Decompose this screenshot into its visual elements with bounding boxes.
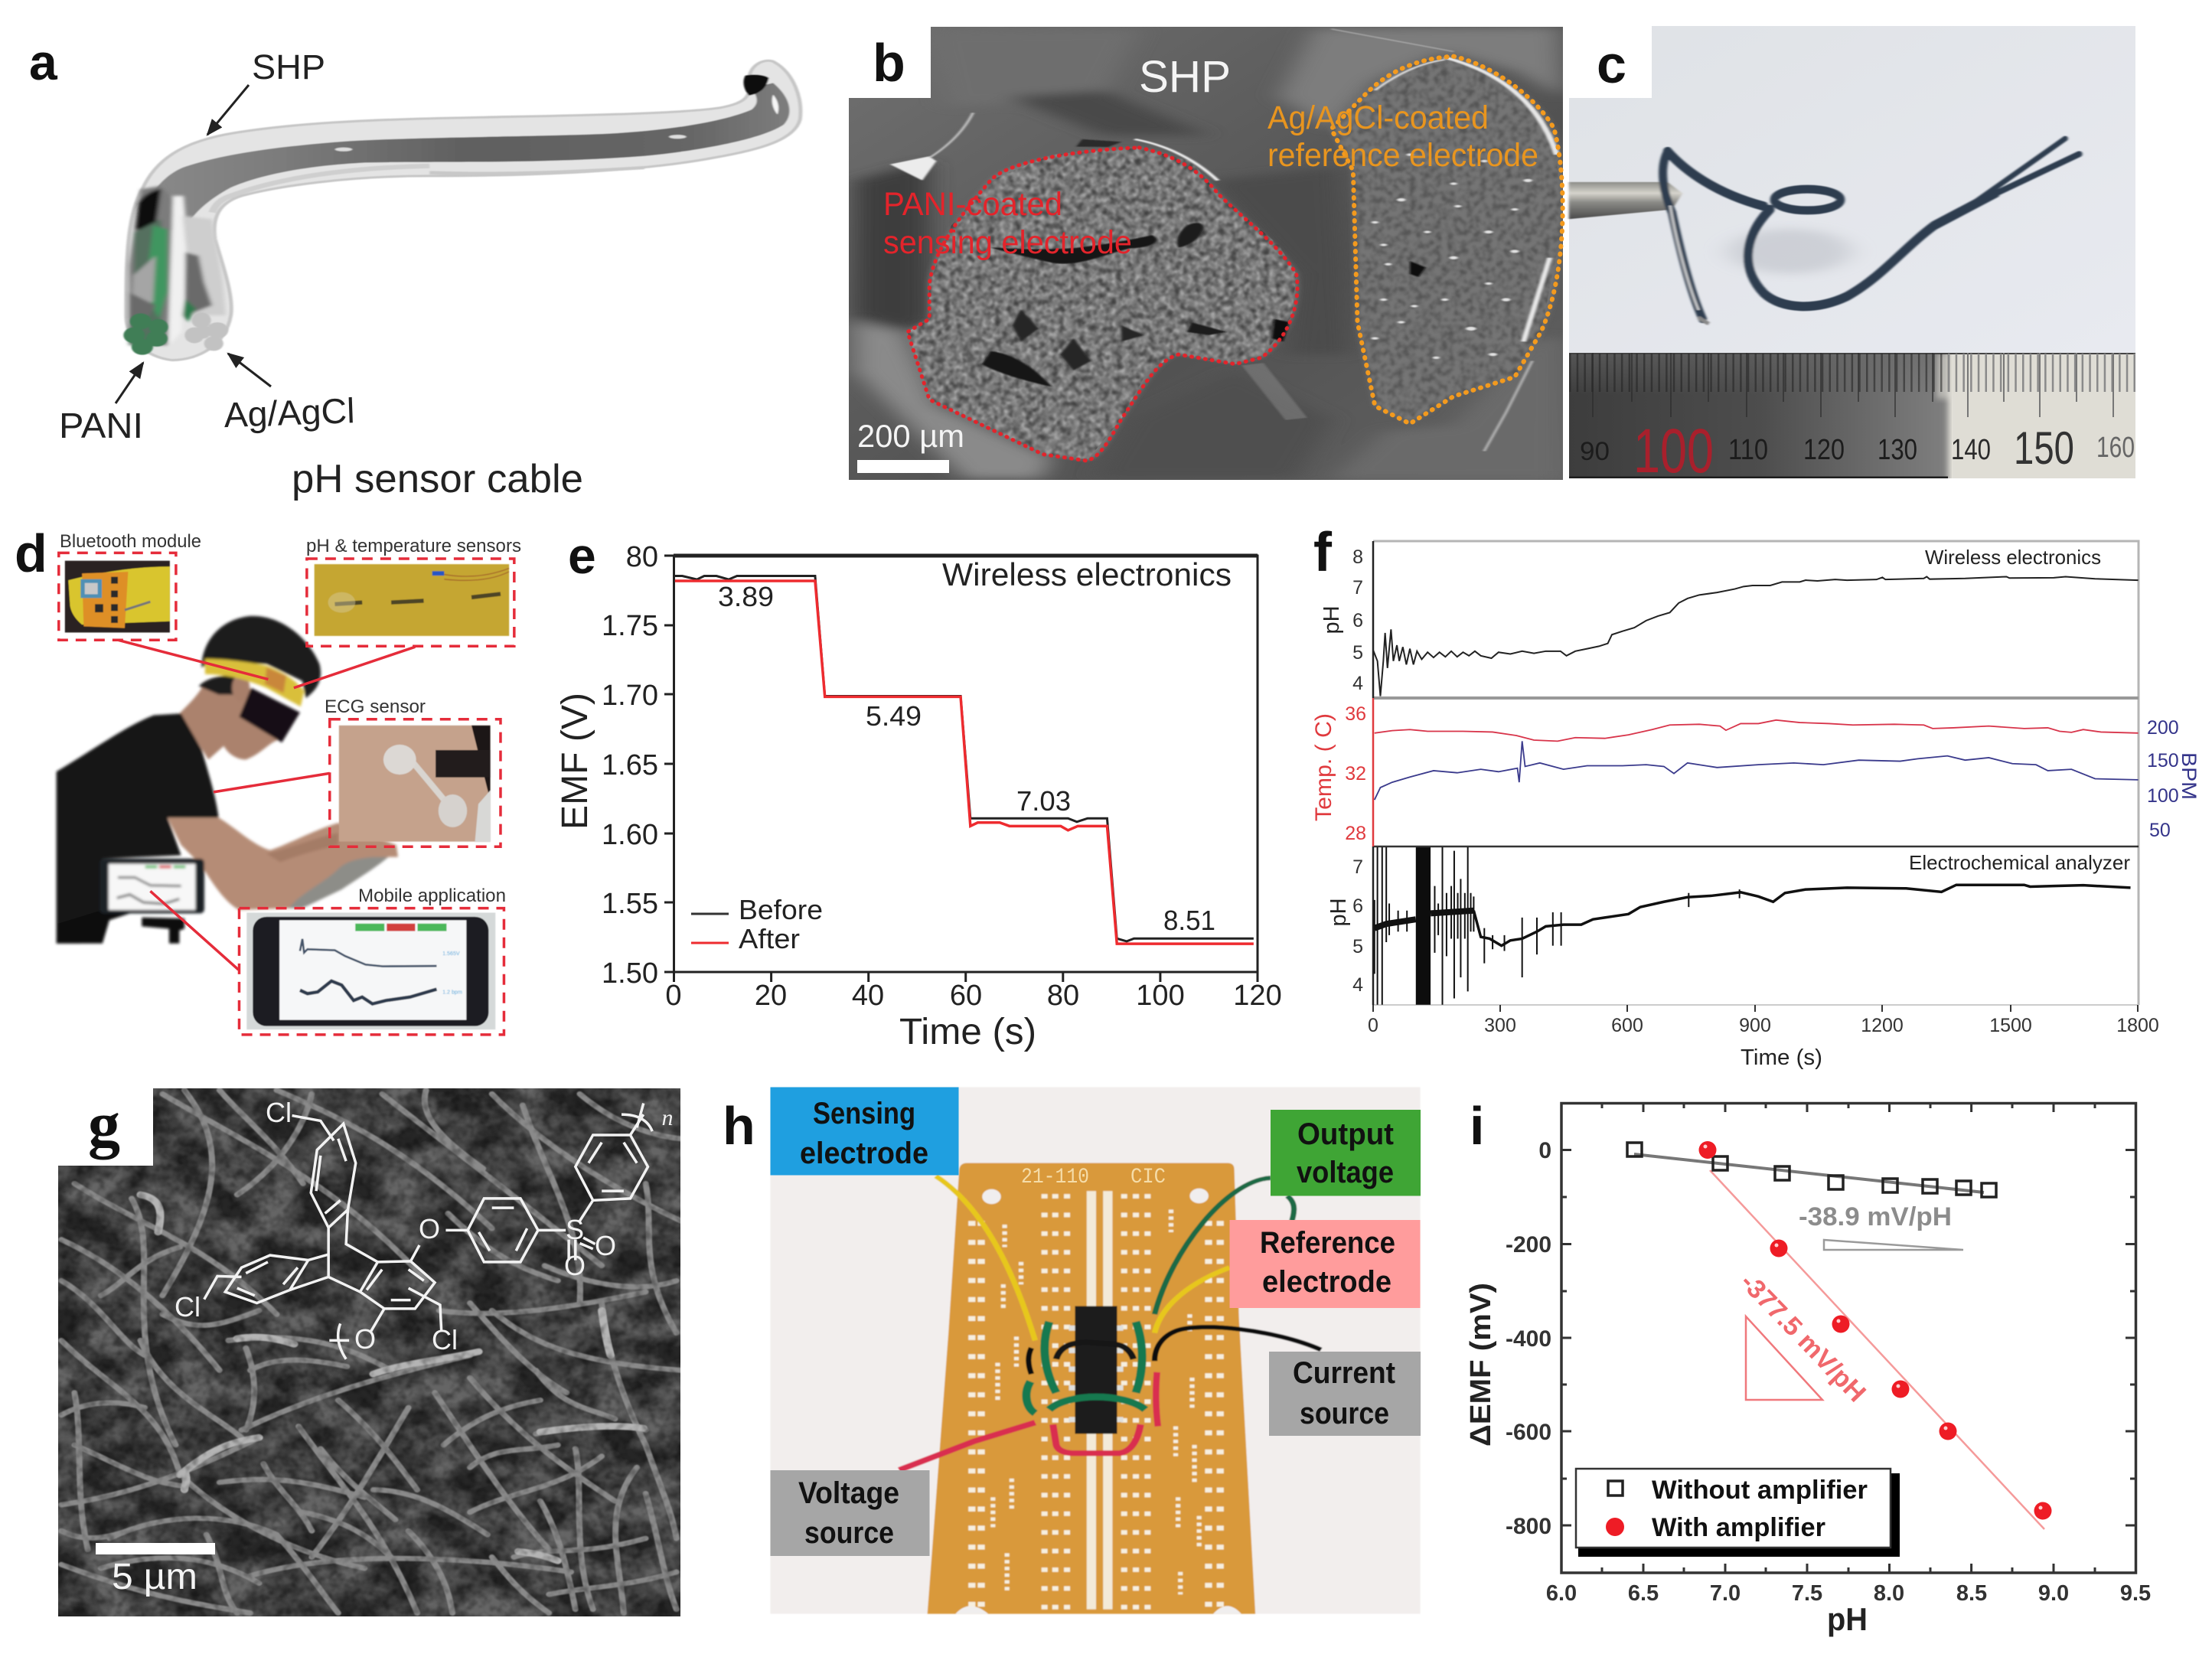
arrow to SHP [207, 85, 249, 135]
left axis labels bottom pH: 4 [1352, 974, 1363, 996]
board print: 21-110 [1021, 1166, 1089, 1189]
panel d: wearable system photo [15, 524, 521, 1035]
photo background [1569, 26, 2135, 353]
label: current source: Current [1293, 1356, 1395, 1390]
polymer chemical structure: Cl [266, 1097, 292, 1128]
x axis tick labels: 0 [1368, 1015, 1378, 1036]
left axis labels top pH: 6 [1352, 610, 1363, 631]
x axis tick labels: 1800 [2116, 1015, 2159, 1036]
small phone [100, 859, 204, 913]
SEM image [849, 27, 1563, 480]
right axis labels BPM: 150 [2147, 750, 2179, 771]
x axis tick labels: 60 [950, 980, 982, 1012]
y axis tick labels: 1.50 [602, 957, 658, 990]
torso [57, 713, 219, 944]
y axis tick labels: -400 [1506, 1326, 1551, 1352]
x axis tick labels: 40 [852, 980, 884, 1012]
axis title: Time: Time (s) [1741, 1045, 1822, 1070]
left axis labels bottom pH [1352, 856, 1363, 996]
panel a: pH sensor cable illustration [29, 34, 801, 501]
polymer chemical structure: Cl [175, 1291, 201, 1323]
panel letter g: g [88, 1089, 120, 1160]
axis title: BPM: BPM [2178, 752, 2201, 800]
y axis tick labels: -200 [1506, 1232, 1551, 1257]
label SHP: SHP [252, 47, 325, 86]
polymer chemical structure: S [566, 1214, 584, 1245]
fit line without amplifier [1634, 1154, 1984, 1192]
photo: mobile application [246, 912, 495, 1029]
scale label: 5 µm [112, 1557, 197, 1597]
label PANI electrode: PANI-coated [883, 186, 1062, 223]
axis title: EMF: EMF (V) [555, 693, 595, 830]
label: current source: source [1300, 1397, 1389, 1430]
polymer chemical structure: Cl [432, 1324, 458, 1355]
x axis tick labels [665, 980, 1282, 1012]
panel letter c: c [1597, 34, 1626, 94]
y axis tick labels [1506, 1138, 1551, 1539]
left axis labels temperature: 28 [1345, 823, 1366, 844]
caption: pH sensor cable [292, 457, 583, 501]
label: output voltage: Output [1297, 1117, 1394, 1151]
y axis tick labels: 1.60 [602, 819, 658, 851]
axis title: pH: pH [1827, 1601, 1868, 1637]
headband [205, 659, 304, 706]
pH step labels: 5.49 [866, 700, 922, 732]
y axis tick labels: 1.65 [602, 749, 658, 781]
left axis labels top pH: 8 [1352, 546, 1363, 568]
x axis tick labels: 300 [1484, 1015, 1516, 1036]
y axis tick labels: -800 [1506, 1514, 1551, 1539]
scale label: 200 µm [857, 418, 964, 454]
photo: Bluetooth module [65, 561, 170, 632]
y axis tick labels: 1.70 [602, 680, 658, 712]
SEM fiber image [58, 1088, 681, 1617]
label Bluetooth module: Bluetooth module [60, 531, 201, 552]
label Electrochemical analyzer: Electrochemical analyzer [1909, 851, 2130, 874]
label: output voltage: voltage [1297, 1156, 1394, 1189]
x axis tick labels: 8.5 [1956, 1581, 1987, 1606]
frames and axes [1373, 541, 2139, 1012]
axis title: pH top: pH [1320, 605, 1344, 634]
y axis tick labels: 1.55 [602, 888, 658, 920]
label Ag/AgCl electrode [1267, 99, 1538, 174]
polymer chemical structure: O [354, 1323, 376, 1355]
panel letter i: i [1470, 1096, 1484, 1156]
legend [1576, 1469, 1900, 1557]
label PANI electrode [883, 186, 1132, 261]
label Ag/AgCl: Ag/AgCl [223, 390, 355, 435]
left axis labels temperature: 36 [1345, 703, 1366, 725]
dotted outline: PANI electrode [908, 148, 1297, 461]
photo: mobile application: 1.2 bpm [442, 989, 462, 995]
hand and arm [168, 817, 398, 910]
left axis labels bottom pH: 7 [1352, 856, 1363, 878]
label: current source [1269, 1352, 1421, 1436]
panel b: SEM cross-section [849, 27, 1563, 480]
label: voltage source [770, 1470, 929, 1556]
panel letter a: a [29, 34, 58, 90]
plot frame and ticks [664, 556, 1258, 982]
right axis labels BPM: 200 [2147, 717, 2179, 739]
legend: With amplifier [1652, 1513, 1825, 1542]
left axis labels top pH [1352, 546, 1363, 694]
pH step labels: 7.03 [1016, 785, 1071, 817]
slope label red: -377.5 mV/pH [1734, 1267, 1871, 1407]
label ECG sensor: ECG sensor [325, 696, 426, 717]
x axis tick labels: 20 [755, 980, 787, 1012]
x axis tick labels: 100 [1136, 980, 1185, 1012]
legend [691, 894, 823, 954]
legend: Before [739, 894, 823, 925]
x axis tick labels: 8.0 [1874, 1581, 1904, 1606]
person on bike [57, 616, 398, 944]
panel letter b: b [873, 33, 905, 93]
y axis tick labels: -600 [1506, 1420, 1551, 1445]
dark voids [990, 235, 1157, 264]
ruler: 110 [1728, 434, 1768, 466]
neck and face [179, 681, 290, 759]
panel letter h: h [723, 1096, 755, 1156]
panel letter d: d [15, 524, 47, 583]
dotted outline: Ag/AgCl electrode [1331, 57, 1563, 424]
label Ag/AgCl electrode: reference electrode [1267, 137, 1538, 174]
label: output voltage [1271, 1110, 1421, 1195]
polymer chemical structure: O [564, 1250, 586, 1281]
red callout boxes and leader lines [59, 553, 514, 1035]
left axis labels top pH: 5 [1352, 642, 1363, 664]
x axis tick labels [1546, 1581, 2151, 1606]
x axis tick labels: 6.5 [1628, 1581, 1659, 1606]
arrow to PANI [116, 363, 143, 403]
polymer chemical structure [175, 1097, 674, 1359]
line: before [675, 576, 1254, 941]
y axis tick labels: 0 [1538, 1138, 1551, 1163]
panel f: on-body time series [1311, 522, 2201, 1070]
label: voltage source: source [804, 1516, 894, 1550]
axis title: Time: Time (s) [899, 1012, 1036, 1052]
slope label gray: -38.9 mV/pH [1799, 1202, 1952, 1231]
chart title: Wireless electronics [942, 556, 1232, 592]
privacy bar [239, 688, 300, 742]
panel i: calibration scatter plot [1465, 1096, 2151, 1637]
ruler: 130 [1878, 434, 1917, 466]
x axis tick labels: 0 [665, 980, 682, 1012]
fit line with amplifier [1710, 1170, 2044, 1529]
polymer chemical structure: O [419, 1213, 440, 1244]
photo of circuit board [771, 1087, 1421, 1614]
axis title: temperature: Temp. ( C) [1311, 713, 1336, 821]
panel c: cable photo with ruler [1569, 26, 2147, 486]
slope triangle red [1746, 1316, 1822, 1400]
y axis tick labels: 1.75 [602, 610, 658, 642]
x axis tick labels: 1200 [1861, 1015, 1904, 1036]
left axis labels top pH: 4 [1352, 673, 1363, 694]
legend: Without amplifier [1652, 1476, 1868, 1505]
x axis tick labels: 900 [1739, 1015, 1771, 1036]
slope triangle gray [1824, 1240, 1963, 1250]
label Ag/AgCl electrode: Ag/AgCl-coated [1267, 99, 1489, 136]
left axis labels top pH: 7 [1352, 577, 1363, 599]
label pH and temperature sensors: pH & temperature sensors [306, 536, 521, 556]
x axis tick labels: 120 [1233, 980, 1282, 1012]
label: sensing electrode [770, 1087, 958, 1176]
panel letter f: f [1313, 522, 1333, 583]
data: with amplifier [1699, 1141, 2051, 1520]
x axis tick labels: 7.0 [1710, 1581, 1741, 1606]
legend: After [739, 923, 800, 954]
tripod [142, 918, 184, 944]
label Mobile application: Mobile application [358, 886, 506, 906]
panel h: amplifier circuit photo [723, 1087, 1421, 1614]
panel e: EMF step chart [555, 527, 1282, 1052]
plot frame and ticks [1561, 1103, 2135, 1573]
panel g: SEM of fibers with polymer structure [58, 1088, 681, 1617]
bright edges [1134, 139, 1218, 181]
left axis labels temperature: 32 [1345, 763, 1366, 784]
photo: mobile application: 1.565V [442, 951, 460, 957]
polymer chemical structure: O [595, 1230, 616, 1261]
trace: electrochemical pH [1375, 847, 2131, 1005]
label: sensing electrode: Sensing [813, 1097, 915, 1130]
polymer chemical structure: n [661, 1105, 674, 1130]
tweezer and cable [1569, 139, 2080, 324]
ruler: 120 [1803, 434, 1845, 466]
scale bar [96, 1543, 215, 1554]
label: reference electrode: Reference [1260, 1226, 1395, 1260]
ruler: 160 [2096, 432, 2135, 464]
x axis tick labels: 9.0 [2038, 1581, 2069, 1606]
axis title: delta EMF: ΔEMF (mV) [1465, 1283, 1497, 1447]
ruler: 90 [1580, 437, 1610, 466]
x axis tick labels: 1500 [1989, 1015, 2032, 1036]
ruler: 140 [1951, 434, 1991, 466]
hair [201, 616, 321, 698]
board print: CIC [1130, 1166, 1166, 1189]
scale bar [857, 460, 949, 473]
board print [1021, 1166, 1166, 1189]
x axis tick labels: 6.0 [1546, 1581, 1577, 1606]
data: without amplifier [1627, 1143, 1996, 1197]
ruler: 150 [2014, 422, 2074, 474]
left axis labels temperature [1345, 703, 1366, 844]
x axis tick labels: 600 [1611, 1015, 1643, 1036]
label: voltage source: Voltage [798, 1476, 899, 1510]
axis title: pH bottom: pH [1326, 898, 1351, 927]
photo: ECG sensor [339, 726, 491, 842]
right axis labels BPM: 50 [2149, 820, 2171, 841]
trace: temperature [1375, 720, 2139, 741]
panel letter e: e [568, 527, 596, 584]
label PANI: PANI [59, 406, 143, 445]
x axis tick labels: 80 [1047, 980, 1079, 1012]
x axis tick labels: 9.5 [2120, 1581, 2151, 1606]
pH step labels: 3.89 [718, 581, 774, 612]
label Wireless electronics: Wireless electronics [1925, 546, 2101, 569]
illustration: cable body [123, 60, 801, 360]
label: reference electrode: electrode [1262, 1265, 1391, 1299]
trace: heart rate [1375, 741, 2139, 800]
trace: wireless pH [1373, 576, 2139, 696]
pH step labels [718, 581, 1215, 936]
x axis tick labels [1368, 1015, 2159, 1036]
label PANI electrode: sensing electrode [883, 224, 1132, 261]
left axis labels bottom pH: 5 [1352, 936, 1363, 957]
y axis tick labels: 80 [626, 541, 658, 573]
photo: pH and temperature sensors [315, 564, 509, 636]
ruler [1569, 353, 2135, 478]
handlebar [284, 843, 392, 908]
pH step labels: 8.51 [1163, 905, 1215, 936]
ruler: 100 [1633, 416, 1714, 486]
left axis labels bottom pH: 6 [1352, 895, 1363, 917]
right axis labels BPM: 100 [2147, 785, 2179, 807]
x axis tick labels: 7.5 [1792, 1581, 1822, 1606]
line: after [675, 581, 1254, 944]
label SHP: SHP [1139, 52, 1231, 102]
label: sensing electrode: electrode [800, 1137, 928, 1170]
arrow to Ag/AgCl [228, 354, 271, 387]
y axis tick labels [602, 541, 658, 990]
label: reference electrode [1229, 1220, 1421, 1308]
right axis labels BPM [2147, 717, 2179, 841]
